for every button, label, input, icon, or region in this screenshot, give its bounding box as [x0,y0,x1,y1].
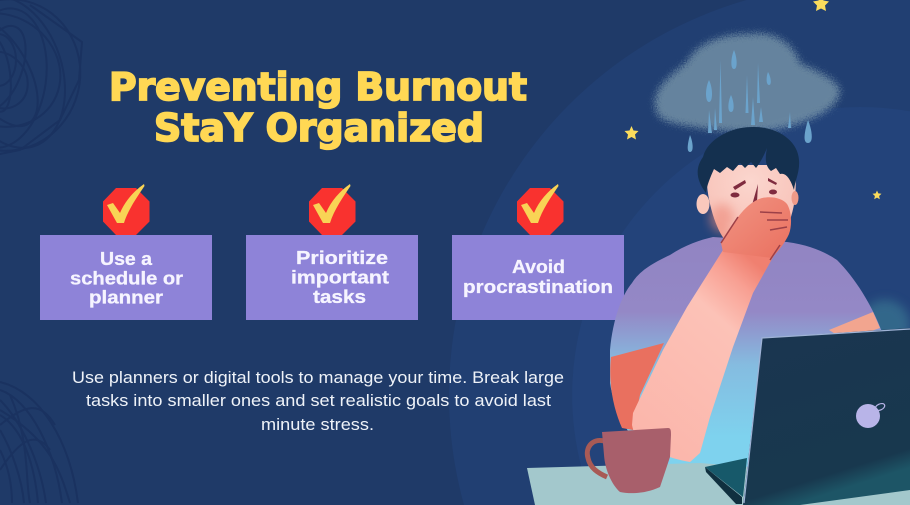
table [527,463,910,505]
body text [72,369,564,434]
arm [632,250,777,462]
neck and face [707,165,796,245]
item 1: use a schedule [40,184,212,320]
body text: tasks into smaller ones and set realistic goals to avoid last [86,392,551,410]
cloud [655,33,840,132]
ear right [792,191,798,205]
box: planner [89,286,163,308]
icon: red octagon check [103,184,150,235]
laptop lid edge [744,329,910,503]
title: Preventing Burnout [109,65,527,109]
body text: minute stress. [261,416,374,434]
stars [624,0,882,199]
rain drops [688,50,812,152]
icon: red octagon check [517,184,564,235]
box: Use a [100,248,153,269]
item 2: prioritize [246,184,418,320]
hair [698,127,799,193]
cheek blush [710,204,734,232]
box: schedule or [70,268,183,288]
title [109,65,527,150]
laptop base [705,458,747,497]
background circle [449,0,910,505]
box: Avoid [512,256,565,277]
inner background circle [572,107,910,505]
box [452,235,624,320]
cup [587,428,671,493]
box: important [291,266,389,288]
illustration: stressed person [527,33,910,505]
laptop [705,328,910,505]
cup body [602,428,671,493]
box: procrastination [463,276,613,297]
scribble: top left [0,0,97,167]
scribble: bottom left [0,382,78,503]
laptop logo [856,402,886,428]
finger lines [721,212,788,260]
box: Prioritize [296,247,388,268]
laptop base edge [705,467,742,504]
torso orange lower left [610,343,664,430]
side shade glow [860,300,910,350]
box [246,235,418,320]
box: tasks [313,286,366,307]
torso orange right patch [829,312,880,340]
item 3: avoid procrastination [452,184,624,320]
icon: red octagon check [309,184,356,235]
title: StaY Organized [154,106,484,150]
ear [696,194,710,214]
torso [610,237,890,504]
eyebrows and eyes [730,178,777,205]
hand [721,197,791,258]
body text: Use planners or digital tools to manage your time. Break large [72,369,564,387]
cup handle [587,440,607,477]
laptop lid [743,328,910,505]
box [40,235,212,320]
